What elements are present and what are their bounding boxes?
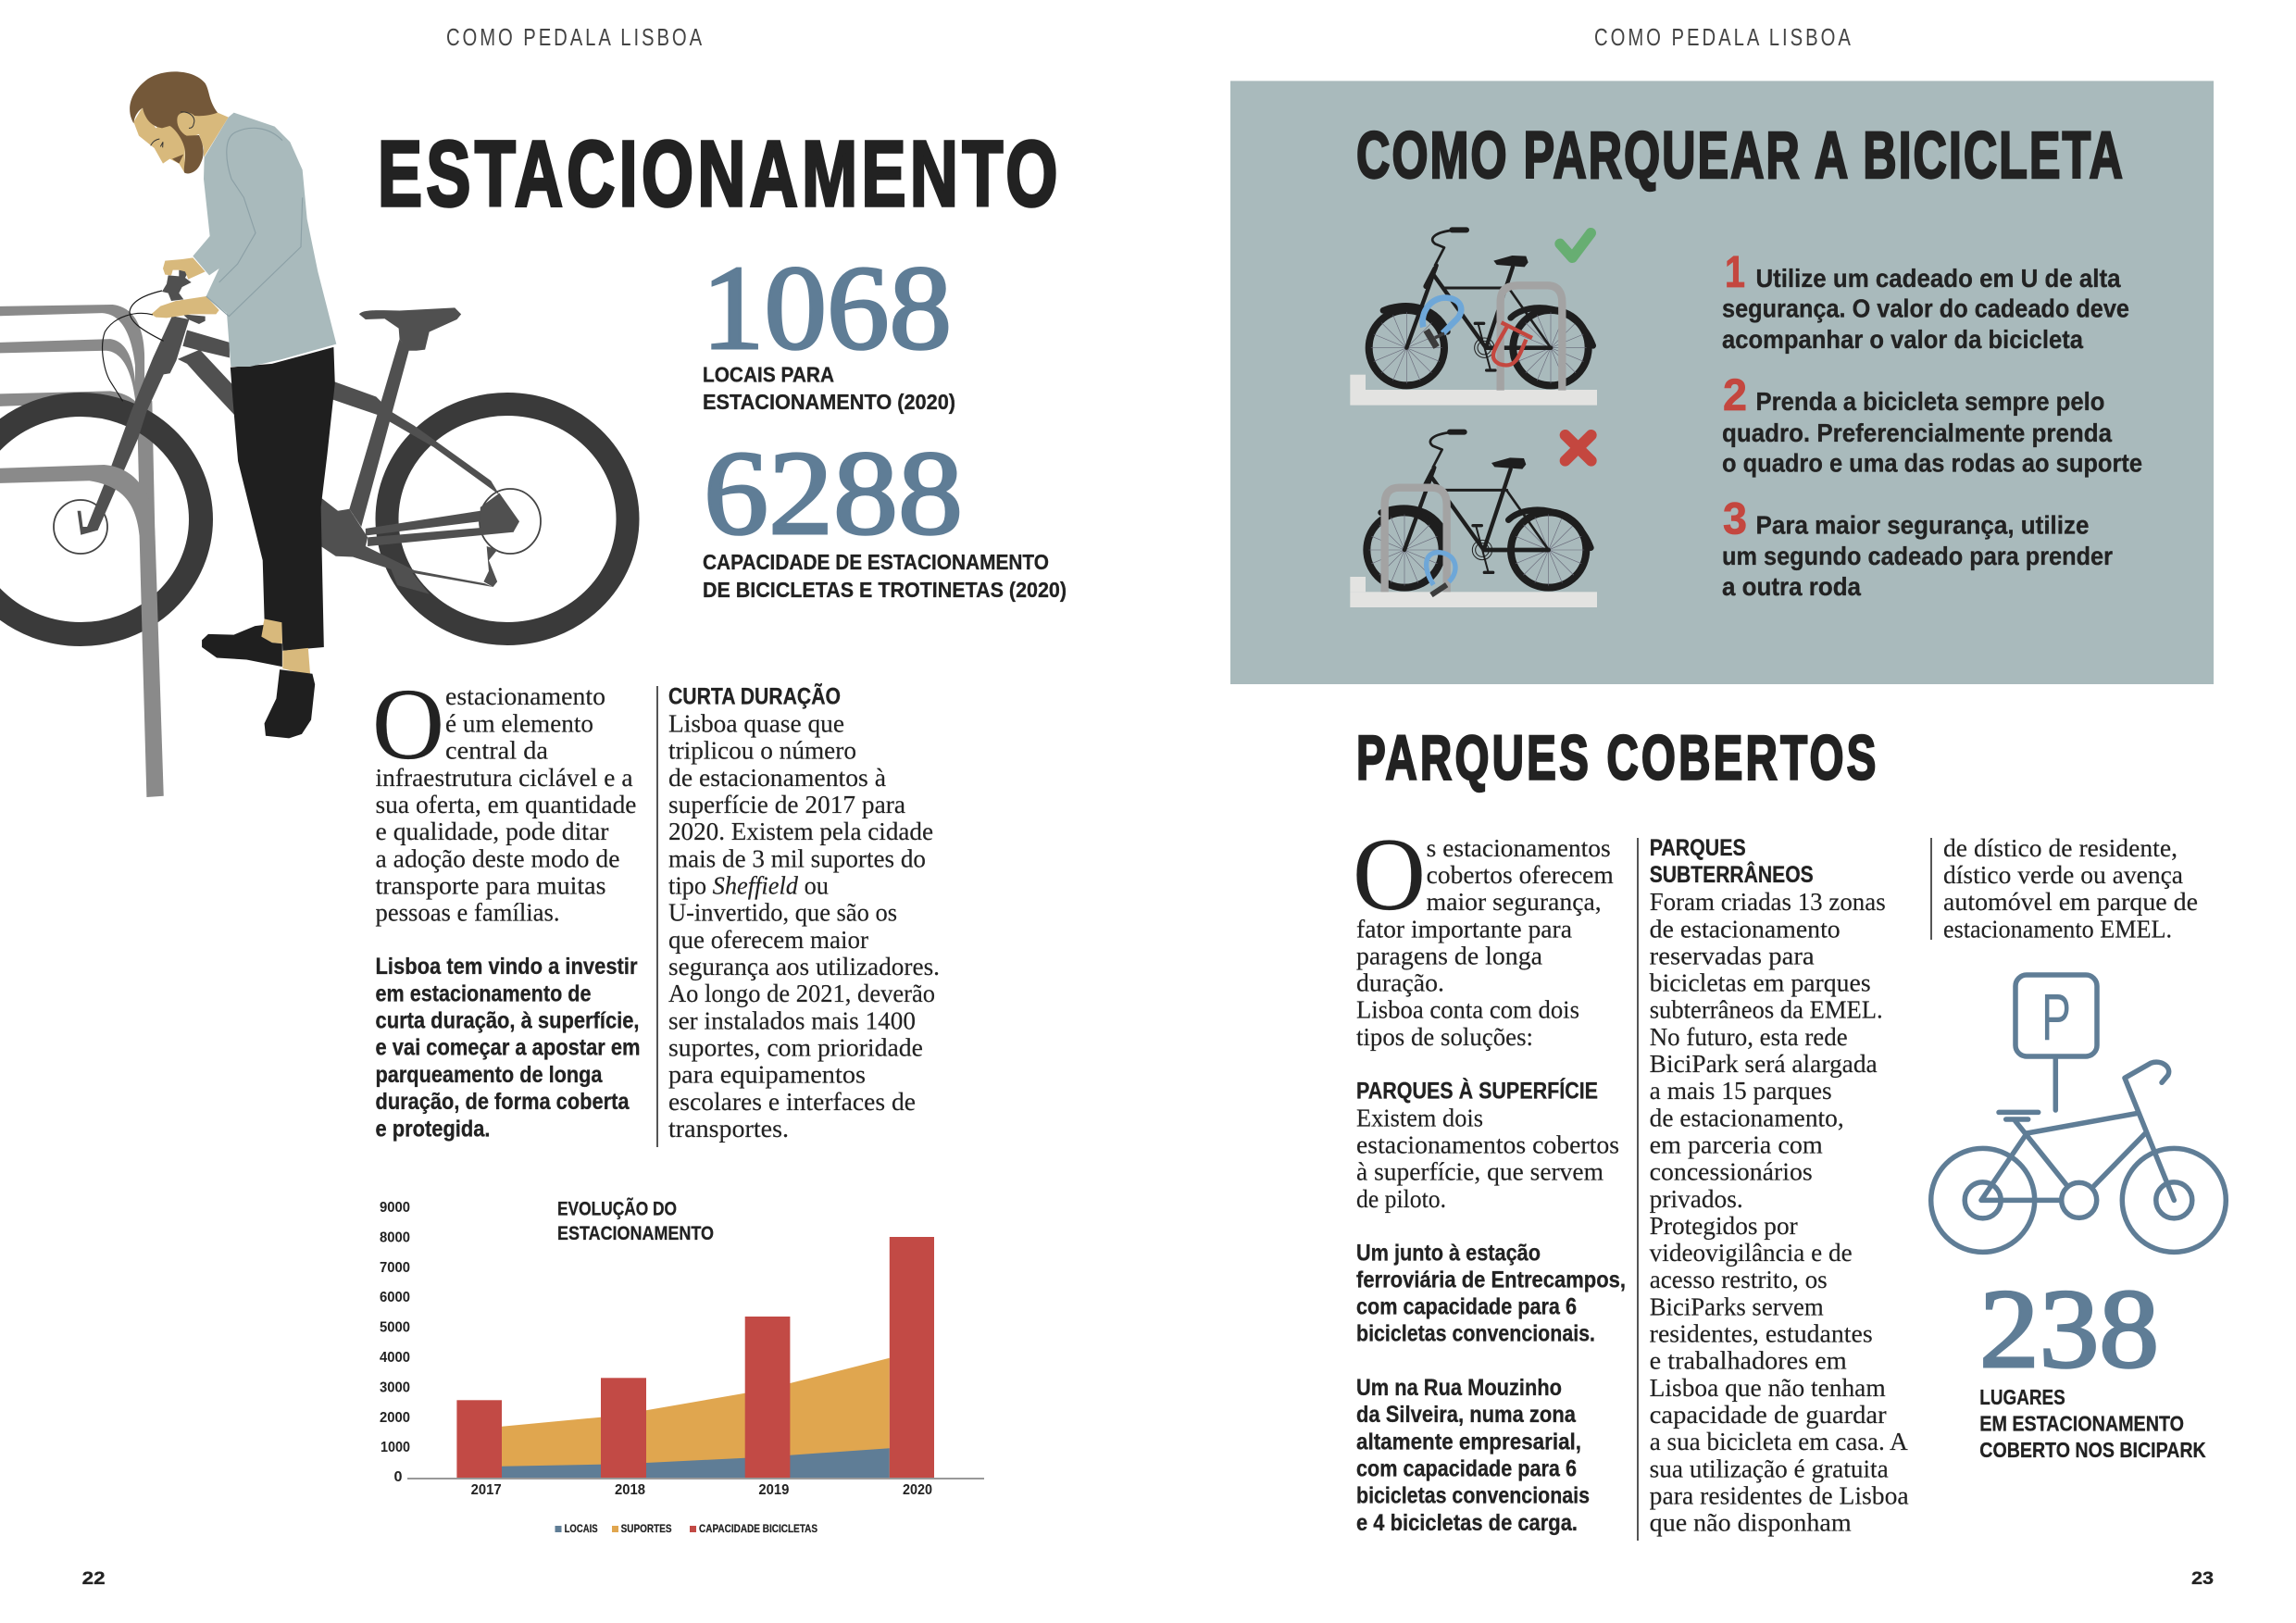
step 1	[1722, 248, 2129, 354]
text column: intro: O	[372, 668, 444, 780]
stat: 6288: 6288	[704, 427, 963, 560]
text column: parques subterrâneos: e trabalhadores em	[1650, 1347, 1847, 1375]
y axis labels: 3000	[380, 1380, 410, 1395]
text column: parques à superfície: Lisboa conta com dois	[1356, 996, 1579, 1024]
text column: intro: curta duração, à superfície,	[376, 1008, 639, 1034]
text column: parques subterrâneos: No futuro, esta rede	[1650, 1023, 1848, 1051]
text column: intro: e protegida.	[376, 1116, 491, 1142]
step 2: o quadro e uma das rodas ao suporte	[1722, 448, 2142, 477]
bicycle	[0, 307, 628, 797]
area: suportes	[502, 1358, 890, 1479]
text column: parques subterrâneos: Protegidos por	[1650, 1212, 1798, 1240]
text column: parques à superfície: tipos de soluções:	[1356, 1023, 1533, 1051]
text column: curta duração: escolares e interfaces de	[668, 1088, 916, 1116]
chart title: ESTACIONAMENTO	[557, 1223, 714, 1244]
text column: intro: estacionamento	[445, 682, 605, 710]
text column: parques à superfície: altamente empresarial,	[1356, 1429, 1581, 1454]
text column: intro: infraestrutura ciclável e a	[376, 764, 633, 792]
front rack bar	[0, 465, 164, 797]
y axis labels: 8000	[380, 1230, 410, 1245]
step 2: 2	[1723, 371, 1747, 420]
text column: parques subterrâneos: subterrâneos da EMEL.	[1650, 996, 1883, 1024]
text column: intro: transporte para muitas	[376, 872, 605, 900]
running header left: COMO PEDALA LISBOA	[446, 24, 703, 51]
y axis labels	[380, 1200, 410, 1485]
text column: parques subterrâneos: residentes, estudantes	[1650, 1319, 1873, 1347]
text column: parques à superfície: da Silveira, numa zona	[1356, 1402, 1577, 1428]
text column: intro: é um elemento	[445, 709, 593, 737]
text column: parques à superfície: s estacionamentos	[1427, 834, 1611, 862]
legend: SUPORTES	[621, 1524, 672, 1535]
text column: intro	[372, 668, 641, 1142]
y axis labels: 6000	[380, 1290, 410, 1305]
x axis labels: 2019	[758, 1482, 789, 1498]
text column: intro: e vai começar a apostar em	[376, 1035, 641, 1061]
x axis labels: 2020	[903, 1482, 932, 1498]
text column: parques à superfície: estacionamentos cobertos	[1356, 1130, 1619, 1158]
text column: curta duração: U-invertido, que são os	[668, 899, 897, 927]
bars: capacidade bicicletas	[456, 1237, 934, 1479]
chart title	[557, 1199, 714, 1244]
text column: parques subterrâneos: capacidade de guardar	[1650, 1401, 1887, 1429]
text column: parques subterrâneos: sua utilização é gratuita	[1650, 1454, 1889, 1482]
frame	[78, 307, 519, 594]
text column: curta duração: ser instalados mais 1400	[668, 1006, 916, 1034]
step 2: Prenda a bicicleta sempre pelo	[1755, 387, 2105, 416]
text column: parques à superfície: maior segurança,	[1427, 888, 1602, 916]
text column: intro: sua oferta, em quantidade	[376, 791, 637, 818]
text column: parques subterrâneos: PARQUES	[1650, 835, 1746, 861]
stat: 238: COBERTO NOS BICIPARK	[1979, 1438, 2206, 1462]
text column: parques à superfície: Um junto à estação	[1356, 1240, 1541, 1266]
text column: parques à superfície: paragens de longa	[1356, 942, 1542, 969]
stat: 238: 238	[1979, 1267, 2159, 1392]
x axis labels	[471, 1482, 932, 1498]
text column: parques à superfície: bicicletas convencionais.	[1356, 1321, 1595, 1347]
text column: parques subterrâneos: em parceria com	[1650, 1130, 1823, 1158]
text column: curta duração: para equipamentos	[668, 1061, 866, 1089]
text column: curta duração: suportes, com prioridade	[668, 1033, 923, 1061]
step 3: a outra roda	[1722, 572, 1861, 601]
text column: intro: em estacionamento de	[376, 980, 592, 1006]
text column: parques subterrâneos: concessionários	[1650, 1158, 1813, 1186]
step 3: um segundo cadeado para prender	[1722, 542, 2113, 570]
text column: curta duração: 2020. Existem pela cidade	[668, 818, 933, 845]
text column: intro: parqueamento de longa	[376, 1062, 603, 1088]
text column: continuation: de dístico de residente,	[1943, 834, 2177, 862]
text column: curta duração	[668, 681, 940, 1142]
text column: intro: duração, de forma coberta	[376, 1089, 630, 1115]
stat: 1068: LOCAIS PARA	[703, 363, 834, 387]
incorrect parking illustration	[1350, 432, 1597, 607]
area: locais	[502, 1448, 890, 1479]
stat: 238: EM ESTACIONAMENTO	[1979, 1411, 2184, 1435]
man: torso, head and hands	[103, 71, 336, 401]
stat: 238	[1979, 1267, 2206, 1462]
text column: continuation: automóvel em parque de	[1943, 888, 2198, 916]
icon: bicycle with parking sign: P	[2041, 981, 2071, 1055]
text column: parques à superfície: cobertos oferecem	[1427, 861, 1614, 889]
legend	[555, 1524, 817, 1535]
step 1: 1	[1725, 248, 1745, 297]
text column: parques à superfície: Existem dois	[1356, 1104, 1483, 1131]
y axis labels: 4000	[380, 1350, 410, 1366]
text column: curta duração: Lisboa quase que	[668, 709, 844, 737]
step 3	[1722, 495, 2113, 601]
step 1: segurança. O valor do cadeado deve	[1722, 293, 2129, 322]
text column: parques subterrâneos: BiciPark será alargada	[1650, 1050, 1878, 1078]
text column: parques subterrâneos: a mais 15 parques	[1650, 1077, 1832, 1105]
front wheel	[0, 405, 201, 634]
text column: parques subterrâneos: de estacionamento,	[1650, 1104, 1844, 1131]
text column: parques à superfície: fator importante para	[1356, 915, 1572, 943]
heading: parques cobertos: PARQUES COBERTOS	[1356, 723, 1876, 793]
text column: curta duração: tipo Sheffield ou	[668, 872, 829, 900]
text column: parques subterrâneos: acesso restrito, os	[1650, 1266, 1828, 1293]
step 2	[1722, 371, 2142, 477]
text column: curta duração: mais de 3 mil suportes do	[668, 844, 926, 872]
cable	[103, 291, 164, 401]
x axis labels: 2018	[615, 1482, 645, 1498]
panel: como parquear a bicicleta	[1230, 81, 2214, 684]
text column: continuation: estacionamento EMEL.	[1943, 915, 2172, 943]
rear wheel	[387, 404, 628, 633]
text column: intro: e qualidade, pode ditar	[376, 818, 609, 845]
text column: parques à superfície: duração.	[1356, 969, 1444, 997]
face and neck	[133, 108, 229, 173]
y axis labels: 0	[394, 1469, 403, 1485]
y axis labels: 7000	[380, 1260, 410, 1276]
step 3: 3	[1723, 495, 1747, 544]
text column: parques à superfície: à superfície, que servem	[1356, 1158, 1603, 1186]
text column: parques subterrâneos: para residentes de Lisboa	[1650, 1481, 1909, 1509]
text column: parques à superfície: ferroviária de Entrecampos,	[1356, 1267, 1626, 1292]
shirt	[193, 113, 336, 367]
y axis labels: 5000	[380, 1320, 410, 1336]
y axis labels: 2000	[380, 1410, 410, 1426]
stat: 6288	[703, 427, 1067, 602]
running header right: COMO PEDALA LISBOA	[1594, 24, 1851, 51]
text column: parques subterrâneos	[1650, 835, 1909, 1537]
text column: parques subterrâneos: Lisboa que não tenham	[1650, 1374, 1886, 1402]
y axis labels: 1000	[381, 1440, 410, 1455]
stat: 1068: ESTACIONAMENTO (2020)	[703, 390, 955, 414]
step 1: acompanhar o valor da bicicleta	[1722, 325, 2083, 354]
text column: curta duração: que oferecem maior	[668, 926, 868, 954]
stat: 238: LUGARES	[1979, 1385, 2065, 1409]
chart title: EVOLUÇÃO DO	[557, 1199, 677, 1220]
text column: parques à superfície: bicicletas convencionais	[1356, 1483, 1590, 1509]
text column: parques subterrâneos: privados.	[1650, 1185, 1743, 1213]
text column: parques à superfície: O	[1353, 818, 1426, 932]
step 3: Para maior segurança, utilize	[1755, 511, 2089, 540]
text column: parques à superfície: com capacidade para 6	[1356, 1455, 1577, 1481]
text column: curta duração: triplicou o número	[668, 737, 856, 765]
text column: parques subterrâneos: bicicletas em parques	[1650, 969, 1871, 997]
text column: parques subterrâneos: BiciParks servem	[1650, 1292, 1824, 1320]
text column: parques subterrâneos: Foram criadas 13 zonas	[1650, 888, 1886, 916]
text column: parques à superfície: com capacidade para 6	[1356, 1294, 1577, 1320]
text column: parques à superfície: de piloto.	[1356, 1185, 1446, 1213]
icon: bicycle with parking sign	[1931, 975, 2226, 1252]
stat: 1068: 1068	[702, 242, 952, 375]
text column: parques subterrâneos: videovigilância e de	[1650, 1239, 1853, 1267]
text column: parques subterrâneos: a sua bicicleta em casa. A	[1650, 1428, 1908, 1455]
text column: intro: central da	[445, 737, 548, 765]
text column: parques subterrâneos: que não disponham	[1650, 1509, 1852, 1537]
icon: green check	[1560, 233, 1591, 257]
panel heading: COMO PARQUEAR A BICICLETA	[1356, 119, 2123, 193]
y axis labels: 9000	[380, 1200, 410, 1216]
step 2: quadro. Preferencialmente prenda	[1722, 418, 2112, 447]
correct parking illustration	[1350, 230, 1597, 406]
text column: curta duração: CURTA DURAÇÃO	[668, 681, 841, 709]
stat: 6288: CAPACIDADE DE ESTACIONAMENTO	[703, 550, 1049, 574]
legend: LOCAIS	[565, 1524, 598, 1535]
page number 23: 23	[2191, 1569, 2214, 1589]
text column: curta duração: Ao longo de 2021, deverão	[668, 980, 935, 1007]
text column: curta duração: superfície de 2017 para	[668, 791, 905, 818]
stat: 6288: DE BICICLETAS E TROTINETAS (2020)	[703, 578, 1067, 602]
hands	[163, 257, 206, 280]
page number 22: 22	[82, 1569, 106, 1589]
handlebar	[162, 270, 192, 301]
text column: parques à superfície: e 4 bicicletas de carga.	[1356, 1510, 1578, 1536]
text column: curta duração: transportes.	[668, 1115, 789, 1142]
hair and beard	[130, 71, 218, 173]
text column: intro: a adoção deste modo de	[376, 844, 620, 872]
icon: red cross	[1566, 435, 1591, 461]
x axis labels: 2017	[471, 1482, 502, 1498]
back rack bars	[0, 305, 156, 543]
text column: continuation	[1943, 834, 2198, 943]
text column: curta duração: de estacionamentos à	[668, 764, 886, 792]
man: legs and shoes	[202, 347, 335, 738]
chart: evolução do estacionamento	[380, 1199, 984, 1535]
text column: parques à superfície: Um na Rua Mouzinho	[1356, 1375, 1562, 1401]
text column: curta duração: segurança aos utilizadores.	[668, 953, 940, 980]
text column: intro: Lisboa tem vindo a investir	[376, 954, 638, 980]
illustration: man locking a bicycle to a rack	[0, 71, 628, 797]
text column: parques subterrâneos: SUBTERRÂNEOS	[1650, 860, 1814, 888]
legend: CAPACIDADE BICICLETAS	[699, 1524, 817, 1535]
text column: intro: pessoas e famílias.	[376, 899, 559, 927]
text column: parques à superfície	[1353, 818, 1626, 1536]
title: estacionamento: ESTACIONAMENTO	[378, 122, 1057, 226]
text column: parques à superfície: PARQUES À SUPERFÍCIE	[1356, 1077, 1598, 1104]
text column: parques subterrâneos: reservadas para	[1650, 942, 1815, 969]
text column: parques subterrâneos: de estacionamento	[1650, 915, 1841, 943]
step 1: Utilize um cadeado em U de alta	[1755, 264, 2121, 293]
text column: continuation: dístico verde ou avença	[1943, 861, 2183, 889]
